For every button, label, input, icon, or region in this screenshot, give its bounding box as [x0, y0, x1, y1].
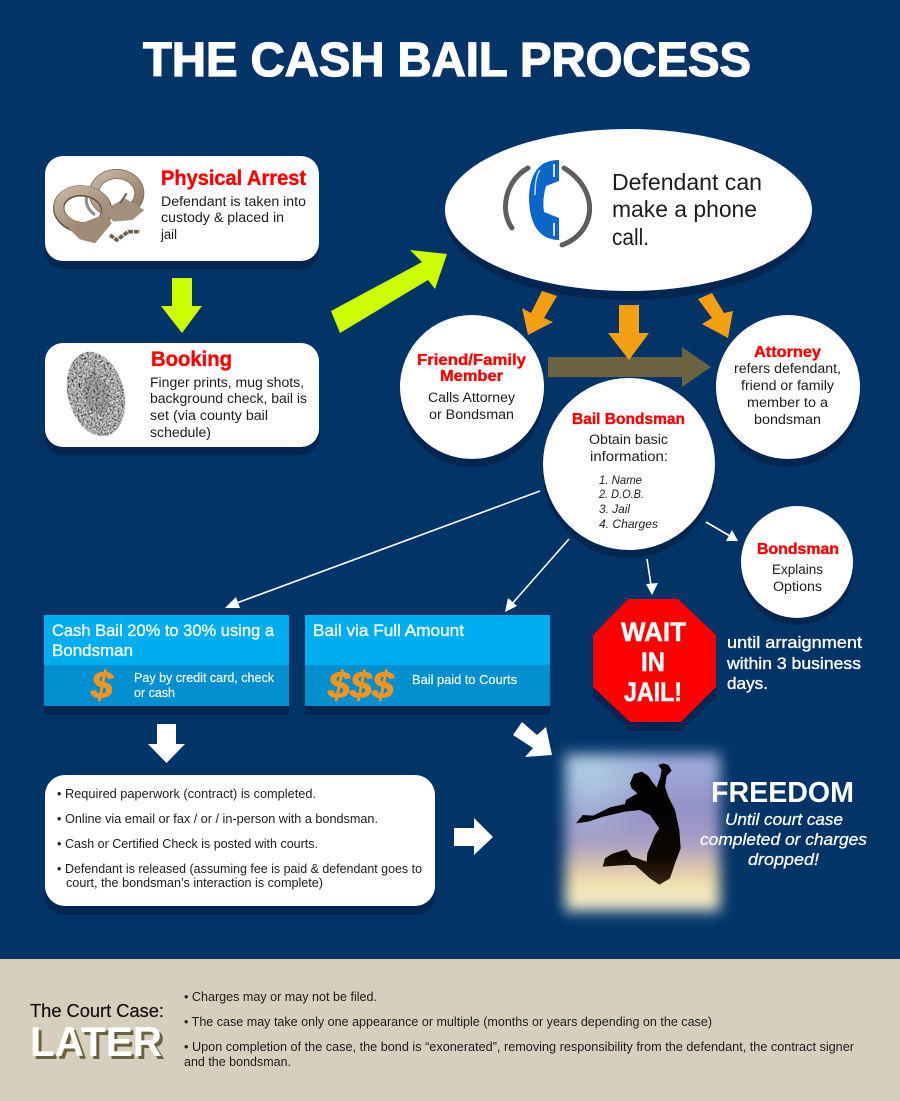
- text: defendant can make a phone call: make a phone: [612, 196, 757, 222]
- list: required information: 1. Name: [599, 473, 642, 487]
- list: bullets: Required paperwork (contract) is completed.: [65, 787, 316, 801]
- text: freedom description: completed or charges: [700, 831, 867, 849]
- text: defendant can make a phone call: [612, 169, 762, 250]
- text: booking description: schedule): [150, 425, 211, 440]
- list: bullets: Cash or Certified Check is posted with courts.: [65, 837, 318, 851]
- arrow: cash bail to paperwork: [148, 724, 185, 763]
- text: until arraignment: within 3 business: [726, 655, 861, 673]
- arrow: phone to bail bondsman: [608, 305, 649, 360]
- panel: wait in jail stop sign: [593, 599, 716, 731]
- arrow: arrest to booking: [161, 278, 202, 333]
- list: bullets: •: [57, 812, 61, 826]
- list: required information: 2. D.O.B.: [598, 487, 644, 501]
- text: wait in jail: IN: [641, 647, 665, 677]
- arrow: paperwork to freedom: [454, 818, 493, 855]
- text: physical arrest description: [160, 194, 306, 242]
- heading: bondsman: Bondsman: [757, 541, 839, 558]
- list: bullets: [57, 787, 422, 890]
- arrow: full amount to freedom: [513, 722, 552, 757]
- panel: phone call ellipse: [445, 129, 812, 300]
- list: court case bullets: and the bondsman.: [184, 1055, 291, 1069]
- heading: friend family member: [417, 352, 526, 385]
- text: pay by credit card: [134, 671, 275, 700]
- text: defendant can make a phone call: call.: [612, 224, 649, 250]
- text: attorney description: refers defendant,: [734, 361, 841, 376]
- list: required information: [598, 473, 658, 531]
- heading: attorney: Attorney: [754, 344, 821, 361]
- heading: cash bail: [52, 621, 275, 660]
- list: required information: 4. Charges: [599, 517, 658, 531]
- text: freedom description: Until court case: [725, 811, 843, 829]
- arrow: booking to phone call: [331, 250, 447, 333]
- icon: dollar sign: $: [90, 665, 114, 707]
- heading: full amount: Bail via Full Amount: [313, 621, 464, 640]
- text: until arraignment: [726, 634, 862, 693]
- list: bullets: •: [57, 787, 61, 801]
- heading: later: LATER: [30, 1018, 162, 1065]
- panel: bondsman explains options: [741, 506, 853, 625]
- text: pay by credit card: or cash: [134, 686, 175, 700]
- panel: cash bail using a bondsman: [44, 615, 289, 715]
- text: explains options: Explains: [772, 562, 823, 577]
- text: until arraignment: days.: [727, 675, 768, 693]
- arrow: phone to attorney: [698, 293, 733, 338]
- arrow: phone to friend: [522, 291, 557, 335]
- text: explains options: [772, 562, 823, 594]
- icon: handcuffs: [56, 174, 144, 243]
- text: physical arrest description: jail: [160, 227, 177, 242]
- heading: physical arrest: Physical Arrest: [161, 167, 306, 190]
- arrow: friend to attorney: [548, 347, 711, 387]
- text: until arraignment: until arraignment: [727, 634, 862, 652]
- text: booking description: set (via county bail: [150, 408, 268, 423]
- heading: bail bondsman: Bail Bondsman: [572, 411, 685, 428]
- text: wait in jail: JAIL!: [624, 677, 682, 707]
- heading: friend family member: Member: [440, 368, 503, 385]
- list: required information: 3. Jail: [599, 502, 630, 516]
- icon: fingerprint: [58, 345, 134, 443]
- text: obtain basic information: [589, 432, 668, 464]
- panel: friend or family member: [400, 315, 544, 467]
- heading: cash bail: Bondsman: [52, 641, 133, 660]
- text: physical arrest description: custody & placed in: [161, 210, 284, 225]
- text: defendant can make a phone call: Defendant can: [612, 169, 762, 195]
- list: court case bullets: • The case may take only one appearance or multiple (months or years depending on the case): [184, 1015, 712, 1029]
- arrow: bondsman to cash bail: [225, 491, 540, 608]
- list: court case bullets: • Upon completion of the case, the bond is “exonerated”, removing responsibility from the defendant, the contract signer: [184, 1040, 854, 1054]
- list: bullets: Online via email or fax / or / in-person with a bondsman.: [65, 812, 378, 826]
- text: obtain basic information: information:: [590, 449, 668, 464]
- panel: paperwork steps: [45, 775, 435, 915]
- heading: booking: Booking: [151, 348, 232, 371]
- panel: physical arrest: [45, 156, 319, 269]
- list: bullets: Defendant is released (assuming fee is paid & defendant goes to: [65, 862, 422, 876]
- text: bail paid to courts: Bail paid to Courts: [412, 673, 517, 687]
- text: calls attorney or bondsman: [428, 390, 515, 422]
- icon: telephone: [505, 160, 590, 245]
- text: freedom description: [700, 811, 867, 869]
- arrow: bondsman to wait in jail: [646, 559, 658, 595]
- panel: attorney: [716, 315, 860, 467]
- text: attorney description: friend or family: [741, 378, 834, 393]
- panel: bail bondsman: [543, 378, 715, 558]
- icon: dollar signs: $$$: [327, 665, 395, 707]
- text: freedom description: dropped!: [748, 851, 819, 869]
- panel: bail via full amount: [305, 615, 550, 715]
- list: court case bullets: [184, 990, 854, 1069]
- list: bullets: •: [57, 862, 61, 876]
- text: physical arrest description: Defendant is taken into: [161, 194, 306, 209]
- heading: cash bail: Cash Bail 20% to 30% using a: [52, 621, 275, 640]
- text: explains options: Options: [773, 579, 822, 594]
- arrow: bondsman to explains options: [706, 522, 738, 541]
- text: obtain basic information: Obtain basic: [589, 432, 668, 447]
- list: court case bullets: • Charges may or may not be filed.: [184, 990, 377, 1004]
- text: booking description: Finger prints, mug shots,: [150, 375, 304, 390]
- text: pay by credit card: Pay by credit card, check: [134, 671, 275, 685]
- panel: the court case: [0, 959, 900, 1101]
- text: wait in jail: WAIT: [621, 617, 686, 647]
- title: THE CASH BAIL PROCESS: [143, 34, 751, 87]
- image: jumping figure: [565, 754, 720, 911]
- text: attorney description: member to a: [747, 395, 829, 410]
- list: bullets: court, the bondsman’s interaction is complete): [66, 876, 323, 890]
- heading: the court case: The Court Case:: [30, 1001, 164, 1021]
- heading: friend family member: Friend/Family: [417, 352, 526, 369]
- text: wait in jail: [621, 617, 686, 707]
- arrow: bondsman to full amount: [505, 539, 569, 612]
- text: booking description: [150, 375, 307, 440]
- panel: booking: [45, 343, 319, 455]
- text: booking description: background check, bail is: [150, 391, 307, 406]
- list: bullets: •: [57, 837, 61, 851]
- text: attorney description: [734, 361, 841, 427]
- text: freedom: [700, 777, 867, 869]
- text: freedom: FREEDOM: [711, 777, 854, 809]
- heading: later: LATER: [33, 1021, 165, 1068]
- text: calls attorney or bondsman: Calls Attorney: [428, 390, 515, 405]
- text: attorney description: bondsman: [754, 412, 821, 427]
- text: calls attorney or bondsman: or Bondsman: [429, 407, 514, 422]
